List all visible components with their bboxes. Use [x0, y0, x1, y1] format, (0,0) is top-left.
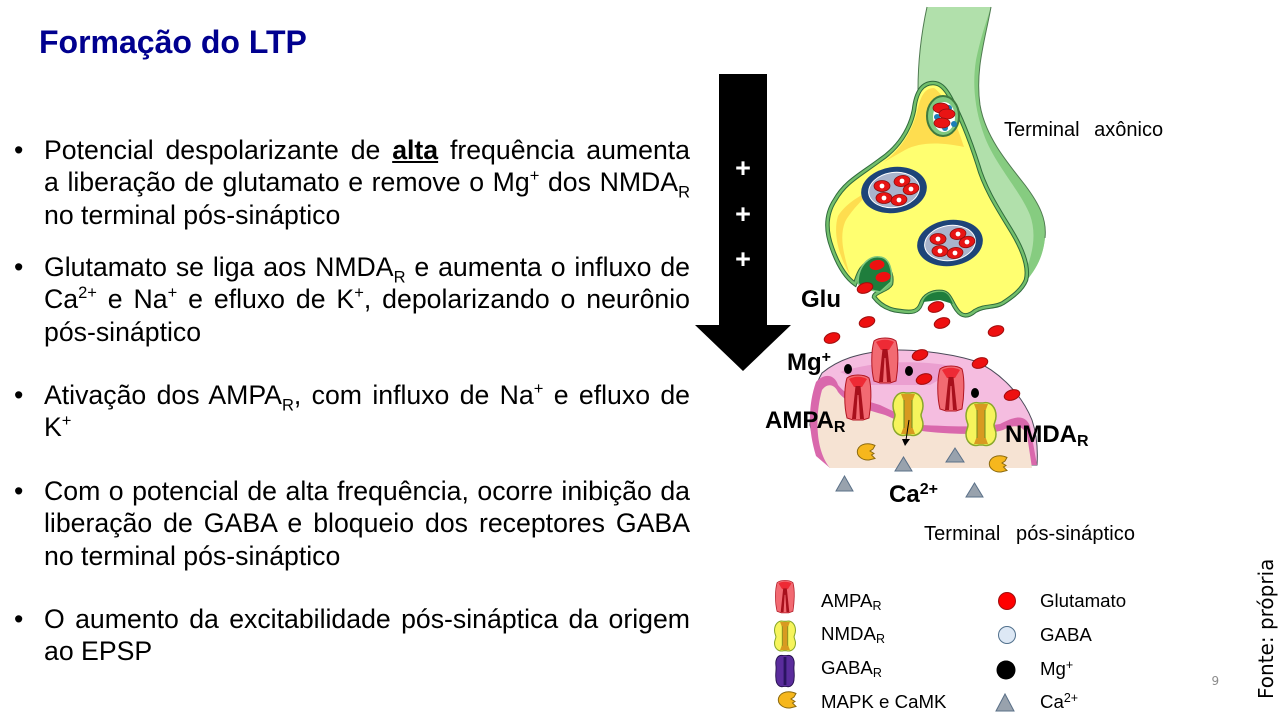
bullet 3: Ativação dos AMPAR, com influxo de Na+ e efluxo de K+: [44, 379, 690, 442]
legend: AMPA: R: [872, 599, 882, 613]
legend: glutamate: [998, 590, 1126, 611]
legend: GABA receptor: GABA: [821, 657, 873, 678]
legend: calcium: [996, 691, 1078, 712]
inner vesicle cluster: [927, 96, 959, 136]
icon: downward black arrow: [695, 74, 791, 371]
legend: magnesium: Mg: [1040, 658, 1066, 679]
synapse illustration: axon terminal: [827, 7, 1045, 315]
labels on illustration: 2+: [920, 481, 938, 498]
bullet 1: •: [14, 135, 23, 165]
legend: GABA receptor: [776, 655, 882, 687]
bullet 3: •: [14, 380, 23, 410]
legend: GABA: [998, 624, 1092, 645]
labels on illustration: NMDA: [1005, 421, 1077, 448]
bullet 5: •: [14, 604, 23, 634]
legend: AMPA: AMPA: [821, 590, 872, 611]
plus signs: [735, 153, 751, 274]
labels on illustration: Ca: [889, 481, 920, 508]
synaptic vesicles: [858, 163, 930, 217]
title: Formação do LTP: [39, 24, 307, 60]
calcium triangles: [836, 448, 983, 497]
bullet 5: O aumento da excitabilidade pós-sináptica da origem ao EPSP: [44, 604, 690, 666]
labels on illustration: Mg: [787, 349, 822, 376]
plus signs: +: [735, 153, 751, 183]
glutamate on membrane: [911, 348, 1021, 402]
postsynaptic terminal: [810, 338, 1037, 472]
label: terminal axônico: Terminal axônico: [1004, 119, 1163, 141]
plus signs: +: [735, 244, 751, 274]
bullet 2: •: [14, 252, 23, 282]
releasing vesicle: [858, 257, 953, 304]
legend: GABA: GABA: [1040, 624, 1092, 645]
legend: [774, 580, 1126, 712]
magnesium ions: [844, 364, 979, 398]
bullet 4: •: [14, 476, 23, 506]
plus signs: +: [735, 199, 751, 229]
legend: NMDA: [774, 621, 885, 651]
label: terminal pós-sináptico: Terminal pós-sináptico: [924, 523, 1135, 545]
bullet 1: Potencial despolarizante de alta frequência aumenta a liberação de glutamato e remove o Mg+ dos NMDAR no terminal pós-sináptico: [44, 135, 690, 230]
legend: AMPA: [775, 580, 882, 613]
labels on illustration: R: [834, 419, 846, 436]
kinases: [857, 444, 1007, 472]
legend: calcium: 2+: [1064, 691, 1078, 705]
labels on illustration: +: [822, 349, 831, 366]
page number: 9: [1212, 674, 1219, 688]
labels on illustration: AMPA: [765, 407, 834, 434]
labels on illustration: R: [1077, 433, 1089, 450]
labels on illustration: [765, 286, 1089, 508]
receptors on membrane: [872, 338, 898, 383]
legend: NMDA: R: [876, 632, 885, 646]
legend: glutamate: Glutamato: [1040, 590, 1126, 611]
legend: NMDA: NMDA: [821, 623, 876, 644]
legend: GABA receptor: R: [873, 666, 882, 680]
glutamate molecules: [823, 281, 1005, 345]
legend: calcium: Ca: [1040, 691, 1064, 712]
legend: magnesium: [996, 658, 1073, 680]
labels on illustration: Glu: [801, 286, 841, 313]
presynaptic bouton: [827, 83, 1027, 315]
source note: Fonte: própria: [1254, 559, 1278, 699]
legend: magnesium: +: [1066, 658, 1073, 672]
legend: kinases: MAPK e CaMK: [821, 691, 947, 712]
bullet 2: Glutamato se liga aos NMDAR e aumenta o influxo de Ca2+ e Na+ e efluxo de K+, depolarizando o neurônio pós-sináptico: [44, 252, 690, 347]
bullet 4: Com o potencial de alta frequência, ocorre inibição da liberação de GABA e bloqueio dos receptores GABA no terminal pós-sináptico: [44, 476, 690, 571]
channel arrow: [902, 420, 910, 446]
